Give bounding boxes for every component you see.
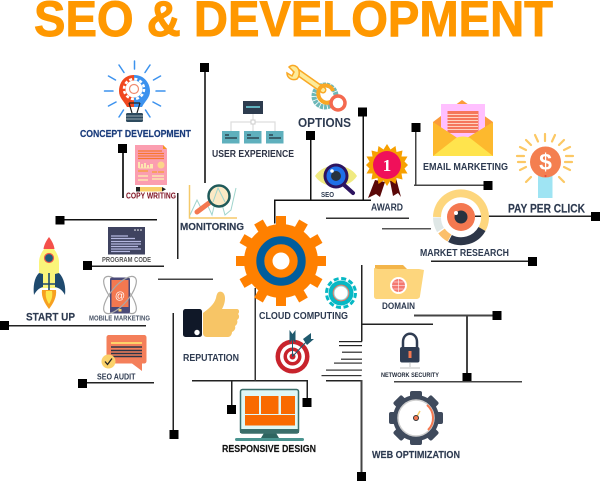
- icon: start up rocket: [34, 237, 65, 309]
- icon: mobile marketing phone: @: [115, 291, 125, 302]
- icon: domain folder: [374, 265, 424, 299]
- label: seo: SEO: [321, 190, 334, 199]
- icon: monitoring chart with magnifier: [190, 185, 237, 218]
- label: options: OPTIONS: [298, 115, 351, 130]
- label: network security: NETWORK SECURITY: [381, 372, 439, 379]
- label: user experience: USER EXPERIENCE: [212, 149, 294, 160]
- label: email marketing: EMAIL MARKETING: [423, 162, 508, 173]
- label: mobile marketing: MOBILE MARKETING: [89, 314, 150, 322]
- icon: copy writing document and pencil: [135, 145, 167, 192]
- icon: concept development light bulb: [104, 61, 165, 122]
- label: monitoring: MONITORING: [180, 221, 244, 233]
- icon: web optimization speedometer gear: [389, 391, 443, 445]
- icon: options wrench and gears: [287, 65, 345, 110]
- label: reputation: REPUTATION: [183, 353, 239, 364]
- label: responsive design: RESPONSIVE DESIGN: [222, 443, 316, 455]
- icon: pay per click dollar tag: $: [539, 149, 552, 175]
- icon: seo audit speech bubble: [102, 335, 146, 371]
- icon: email envelope: [433, 100, 493, 156]
- icon: cloud computing gear: [326, 278, 356, 308]
- icon: reputation thumbs up: [183, 292, 239, 337]
- icon: award rosette: [366, 144, 408, 198]
- label: start up: START UP: [26, 312, 75, 324]
- icon: pay per click dollar tag: [517, 134, 573, 198]
- label: award: AWARD: [371, 202, 403, 214]
- icon: responsive design monitor: [235, 390, 304, 441]
- label: web optimization: WEB OPTIMIZATION: [372, 449, 460, 461]
- label: pay per click: PAY PER CLICK: [508, 204, 586, 216]
- icon: user experience hierarchy: [222, 101, 284, 144]
- icon: award rosette: 1: [383, 156, 391, 175]
- icon: network security padlock: [400, 334, 420, 368]
- label: concept development: CONCEPT DEVELOPMENT: [80, 129, 191, 140]
- icon: seo magnifying eye: [315, 164, 357, 193]
- label: market research: MARKET RESEARCH: [420, 248, 509, 259]
- label: program code: PROGRAM CODE: [102, 255, 151, 264]
- label: cloud computing: CLOUD COMPUTING: [259, 311, 348, 322]
- icon: market research eye target: [437, 193, 485, 241]
- label: seo audit: SEO AUDIT: [97, 372, 136, 382]
- icon: target with arrows: [276, 330, 314, 374]
- label: copy writing: COPY WRITING: [126, 190, 176, 200]
- icon: program code window: [108, 227, 145, 254]
- icon: mobile marketing phone: [98, 272, 142, 318]
- label: domain: DOMAIN: [382, 301, 415, 312]
- icon: central orange gear: [236, 216, 326, 306]
